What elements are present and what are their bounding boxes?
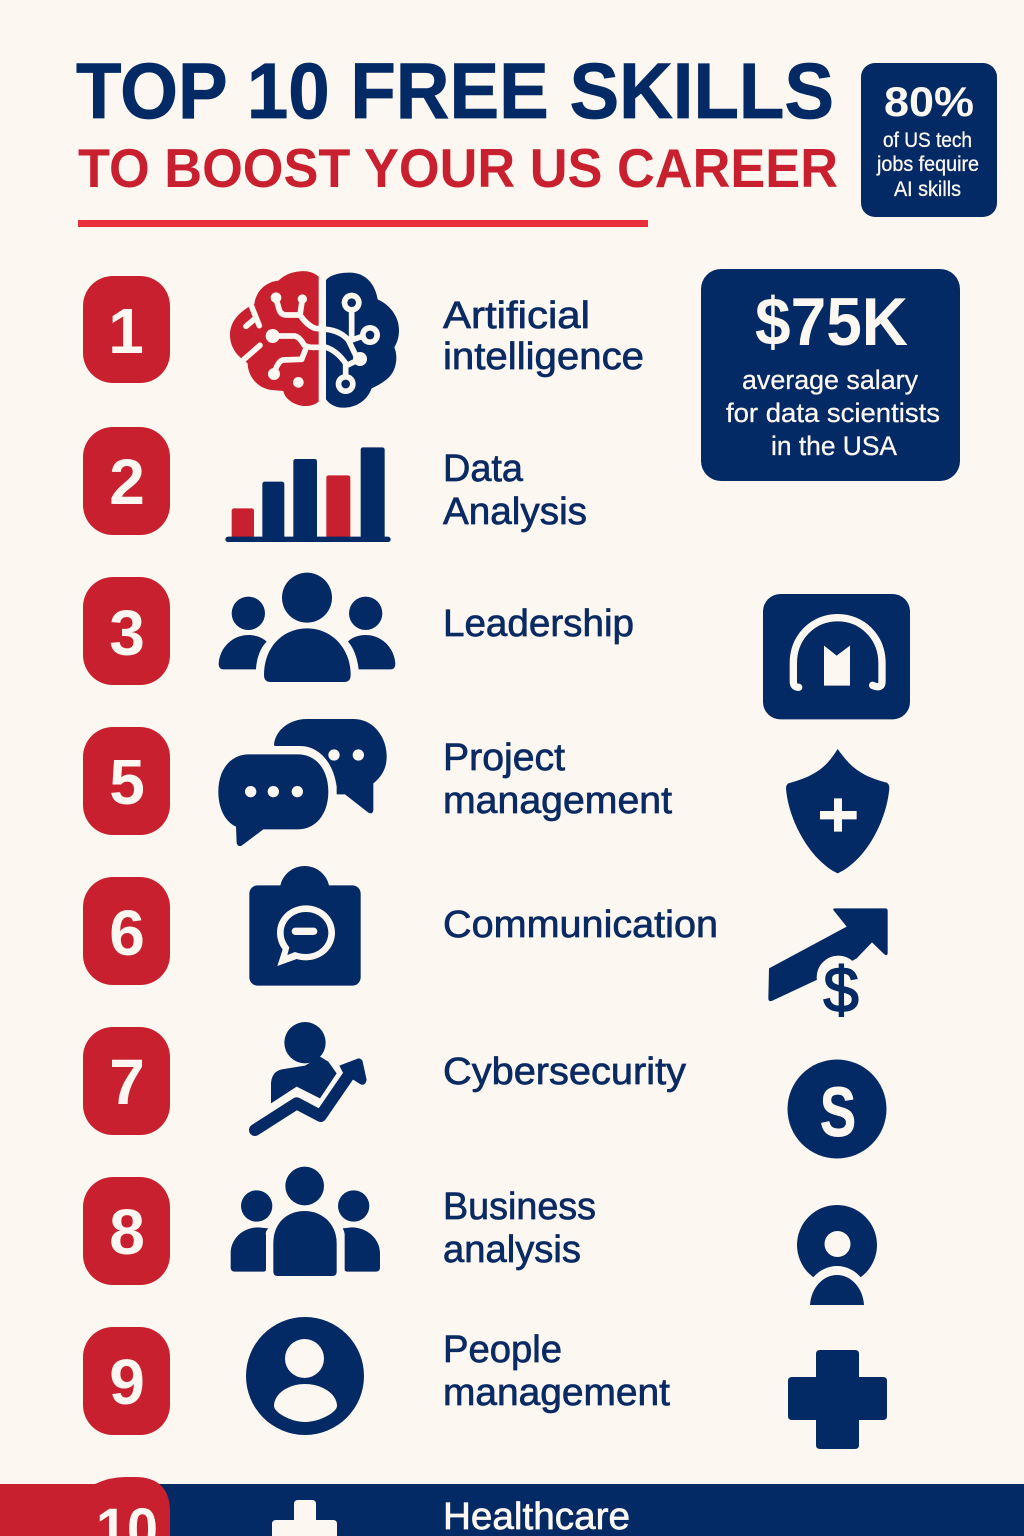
icon: team bbox=[231, 1167, 380, 1276]
label: Artificial intelligence: Artificial bbox=[443, 295, 590, 337]
label: Data Analysis bbox=[443, 448, 587, 533]
badge 3 bbox=[83, 577, 170, 685]
icon: rising arrow with dollar bbox=[768, 908, 888, 1026]
label: Project management bbox=[443, 737, 672, 822]
badge 9: 9 bbox=[109, 1346, 145, 1418]
label: Data Analysis: Analysis bbox=[443, 491, 587, 533]
badge 2: 2 bbox=[109, 446, 145, 518]
icon: headset tile bbox=[763, 594, 910, 719]
label: Cybersecurity: Cybersecurity bbox=[443, 1051, 686, 1093]
label: Communication: Communication bbox=[443, 904, 718, 946]
badge 5 bbox=[83, 727, 170, 835]
label: Artificial intelligence bbox=[443, 295, 644, 378]
callout: 80% of US tech jobs: of US tech bbox=[883, 129, 972, 152]
callout: 80% of US tech jobs: 80% bbox=[884, 78, 974, 125]
icon: person circle bbox=[246, 1317, 364, 1435]
label: Business analysis: analysis bbox=[443, 1229, 581, 1271]
badge 1 bbox=[83, 276, 170, 383]
callout: $75K salary: $75K bbox=[755, 284, 908, 360]
title: TOP 10 FREE SKILLS bbox=[76, 46, 834, 135]
label: People management: management bbox=[443, 1372, 670, 1414]
title bbox=[76, 46, 838, 199]
badge 6 bbox=[83, 877, 170, 985]
badge 3: 3 bbox=[109, 597, 145, 669]
label: People management: People bbox=[443, 1329, 562, 1371]
badge 7: 7 bbox=[109, 1046, 145, 1118]
callout: $75K salary: in the USA bbox=[771, 431, 897, 461]
label: People management bbox=[443, 1329, 670, 1414]
icon: medical cross bbox=[788, 1350, 887, 1449]
label: Project management: management bbox=[443, 780, 672, 822]
label: Leadership: Leadership bbox=[443, 603, 634, 645]
callout: 80% of US tech jobs bbox=[861, 63, 997, 217]
badge 5: 5 bbox=[109, 746, 145, 818]
callout: $75K salary: for data scientists bbox=[726, 398, 940, 428]
badge 2 bbox=[83, 427, 170, 535]
callout: $75K salary: average salary bbox=[742, 365, 918, 395]
label: Data Analysis: Data bbox=[443, 448, 524, 490]
icon: shield with plus bbox=[786, 749, 889, 873]
icon: S coin bbox=[788, 1060, 886, 1158]
callout: $75K salary bbox=[701, 269, 960, 481]
title underline bbox=[78, 220, 648, 227]
badge 8 bbox=[83, 1177, 170, 1285]
badge 7 bbox=[83, 1027, 170, 1135]
badge 6: 6 bbox=[109, 897, 145, 969]
icon: chat bubbles bbox=[218, 719, 387, 846]
icon: communication case bbox=[249, 866, 361, 986]
label: Artificial intelligence: intelligence bbox=[443, 336, 644, 378]
icon: person badge bbox=[797, 1205, 877, 1340]
title: TO BOOST YOUR US CAREER bbox=[78, 137, 838, 199]
badge 1: 1 bbox=[108, 295, 144, 367]
badge 9 bbox=[83, 1327, 170, 1435]
callout: 80% of US tech jobs: jobs fequire bbox=[876, 153, 979, 176]
callout: 80% of US tech jobs: AI skills bbox=[894, 178, 961, 201]
label: Business analysis bbox=[443, 1186, 596, 1271]
footer band: Healthcare bbox=[0, 1477, 1024, 1536]
icon: rising arrow with dollar: $ bbox=[823, 954, 859, 1026]
icon: AI brain bbox=[230, 271, 399, 408]
badge 8: 8 bbox=[109, 1196, 145, 1268]
label: Business analysis: Business bbox=[443, 1186, 596, 1228]
icon: person with growth arrow bbox=[255, 1022, 367, 1130]
label: Project management: Project bbox=[443, 737, 565, 779]
icon: leadership group bbox=[219, 573, 395, 682]
icon: S coin: S bbox=[820, 1073, 856, 1151]
icon: bar chart bbox=[225, 447, 391, 542]
